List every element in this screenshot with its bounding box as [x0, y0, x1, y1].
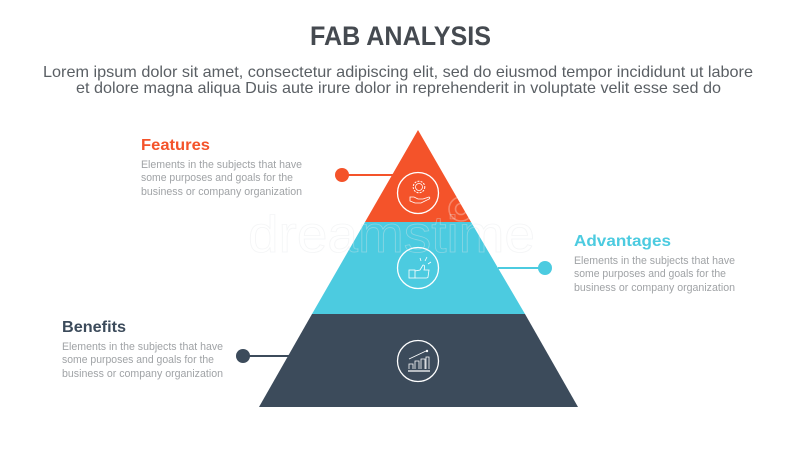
text block: features: Elements in the subjects that have [141, 159, 302, 171]
text block: features: business or company organization [141, 186, 302, 198]
text block: benefits: Elements in the subjects that have [62, 341, 223, 353]
pyramid tier: benefits [259, 314, 578, 407]
connector: features [335, 168, 394, 182]
intro paragraph [43, 64, 753, 97]
text block: advantages [574, 233, 735, 294]
intro paragraph: Lorem ipsum dolor sit amet, consectetur adipiscing elit, sed do eiusmod tempor incididunt ut labore [43, 64, 753, 81]
text block: advantages: Advantages [574, 233, 671, 250]
icon: gear in hand [398, 172, 438, 214]
text block: advantages: some purposes and goals for the [574, 268, 726, 280]
title: FAB ANALYSIS [310, 21, 491, 51]
pyramid tier: features [365, 130, 471, 222]
watermark: dreamstime [248, 206, 535, 264]
text block: benefits [62, 319, 223, 380]
text block: advantages: business or company organization [574, 282, 735, 294]
intro paragraph: et dolore magna aliqua Duis aute irure dolor in reprehenderit in voluptate velit esse sed do [76, 80, 721, 97]
text block: benefits: Benefits [62, 319, 126, 336]
text block: features: Features [141, 137, 210, 154]
connector: benefits [236, 349, 292, 363]
icon: thumbs up [398, 248, 438, 288]
text block: benefits: business or company organization [62, 368, 223, 380]
icon: growth bar chart [398, 340, 438, 382]
text block: features [141, 137, 302, 198]
pyramid tier: advantages [312, 222, 525, 314]
text block: advantages: Elements in the subjects that have [574, 255, 735, 267]
text block: features: some purposes and goals for the [141, 172, 293, 184]
pyramid [259, 130, 578, 407]
connector: advantages [498, 261, 552, 275]
text block: benefits: some purposes and goals for the [62, 354, 214, 366]
